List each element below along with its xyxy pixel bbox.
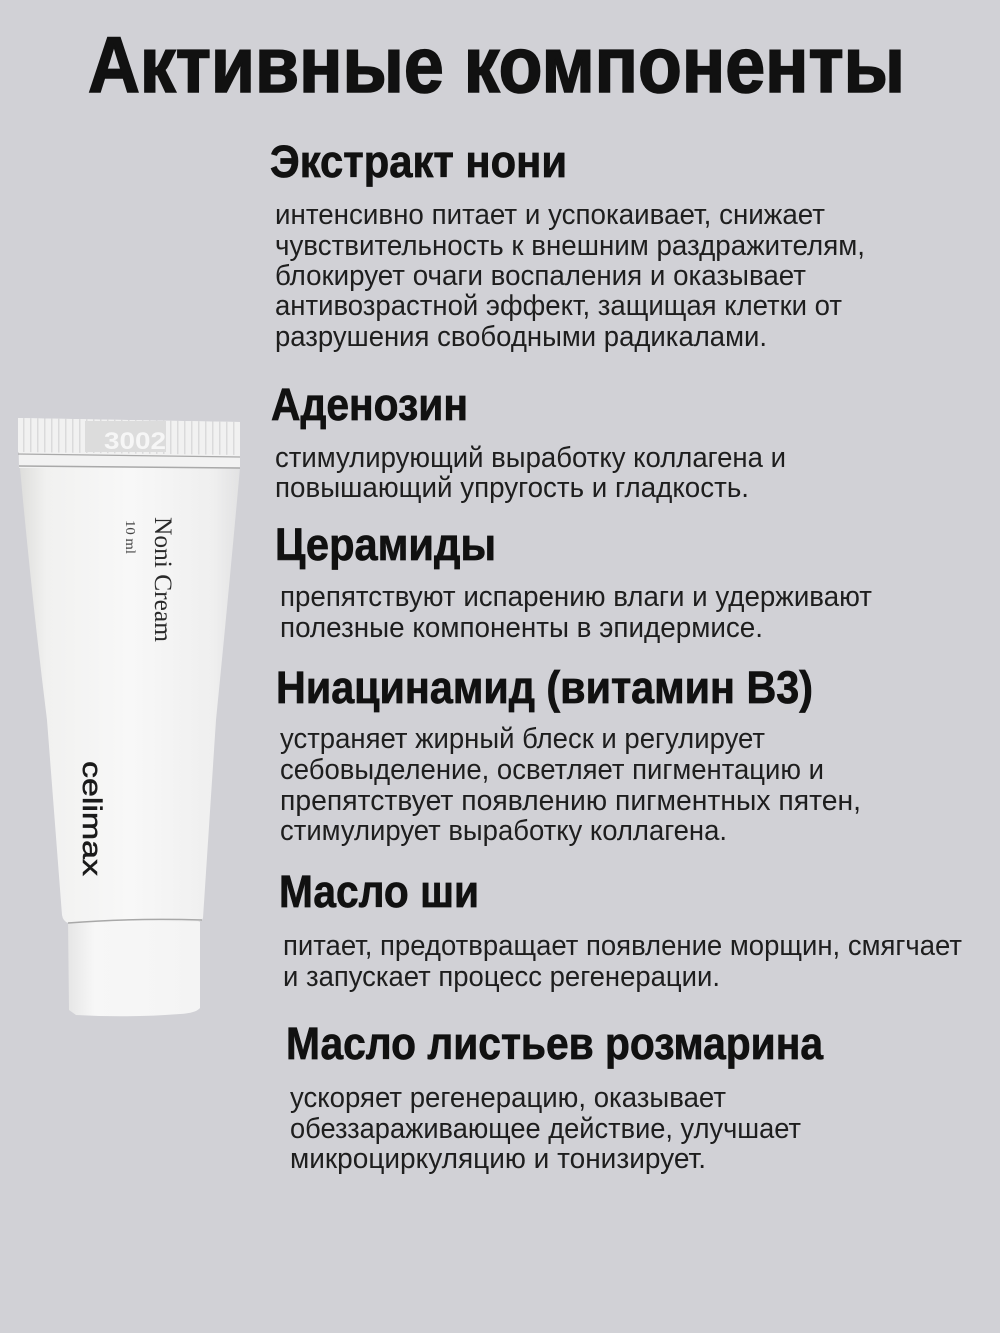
tube cap	[68, 920, 200, 1016]
title: Активные компоненты	[88, 20, 905, 109]
description: питает, предотвращает появление морщин, смягчает	[283, 930, 962, 962]
brand: celimax	[77, 761, 107, 877]
ingredient: ceramides	[275, 519, 872, 644]
heading: Церамиды	[275, 519, 496, 570]
description: препятствует появлению пигментных пятен,	[280, 785, 861, 817]
description: разрушения свободными радикалами.	[275, 321, 767, 353]
crimped seal: 3002	[104, 428, 166, 455]
description: устраняет жирный блеск и регулирует	[280, 723, 765, 755]
description	[283, 930, 962, 993]
description: препятствуют испарению влаги и удерживают	[280, 581, 872, 613]
description: и запускает процесс регенерации.	[283, 961, 720, 993]
volume: 10 ml	[122, 520, 137, 554]
heading: Ниацинамид (витамин В3)	[276, 662, 813, 713]
heading: Масло листьев розмарина	[286, 1018, 824, 1069]
description: интенсивно питает и успокаивает, снижает	[275, 199, 825, 231]
product image: celimax Noni Cream tube	[18, 418, 240, 1016]
description: чувствительность к внешним раздражителям,	[275, 230, 865, 262]
description: повышающий упругость и гладкость.	[275, 472, 749, 504]
ingredient: shea butter	[279, 866, 962, 993]
description: стимулирует выработку коллагена.	[280, 815, 727, 847]
description	[290, 1082, 801, 1175]
description: блокирует очаги воспаления и оказывает	[275, 260, 806, 292]
description: ускоряет регенерацию, оказывает	[290, 1082, 726, 1114]
product name: Noni Cream	[149, 517, 176, 643]
description: обеззараживающее действие, улучшает	[290, 1113, 801, 1145]
ingredient: rosemary leaf oil	[286, 1018, 824, 1175]
description: микроциркуляцию и тонизирует.	[290, 1143, 706, 1175]
tube shadow line above cap	[68, 919, 202, 923]
description: антивозрастной эффект, защищая клетки от	[275, 290, 842, 322]
heading: Масло ши	[279, 866, 479, 917]
tube body	[20, 468, 240, 923]
description	[280, 581, 872, 644]
description: стимулирующий выработку коллагена и	[275, 442, 786, 474]
ingredient: adenosine	[271, 379, 786, 504]
description: полезные компоненты в эпидермисе.	[280, 612, 763, 644]
ingredient: noni extract	[270, 136, 865, 353]
description	[275, 199, 865, 353]
ingredient: niacinamide	[276, 662, 861, 847]
heading: Аденозин	[271, 379, 468, 430]
heading: Экстракт нони	[270, 136, 567, 187]
description	[280, 723, 861, 847]
description: себовыделение, осветляет пигментацию и	[280, 754, 824, 786]
crimped seal	[18, 418, 240, 468]
description	[275, 442, 786, 504]
